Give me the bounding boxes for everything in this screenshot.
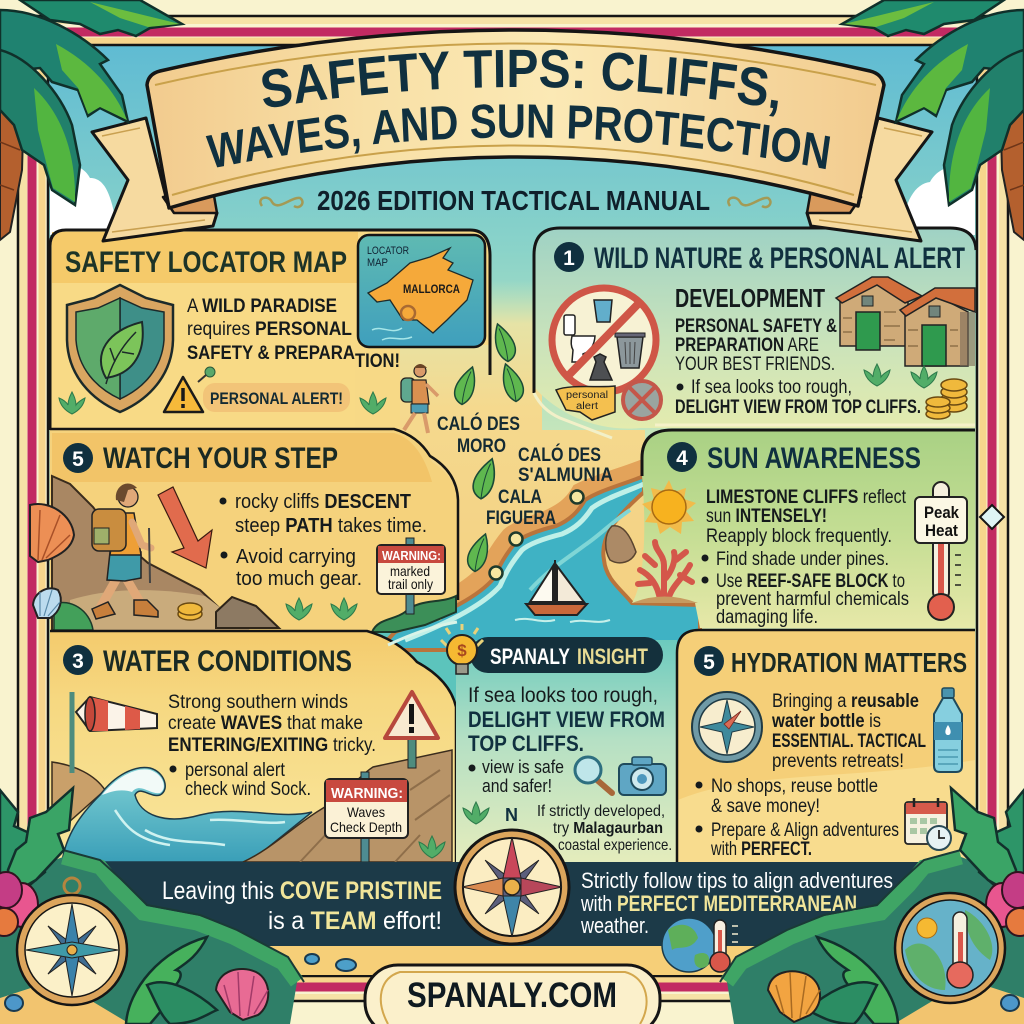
text: wild paradise — [187, 296, 400, 372]
number badge 4: 4 — [676, 447, 688, 470]
text: hydration body: Prepare & Align adventures — [711, 820, 899, 841]
text: sun awareness body: damaging life. — [716, 607, 818, 628]
text: insight body: DELIGHT VIEW FROM — [468, 707, 665, 732]
heading: sun awareness: SUN AWARENESS — [707, 442, 921, 475]
text: development: DEVELOPMENT — [675, 283, 825, 313]
map: hiker, leaves and place labels — [401, 324, 613, 622]
text: wild paradise: requires PERSONAL — [187, 319, 352, 340]
title ribbon — [145, 28, 886, 210]
icon: thermometer peak heat — [915, 482, 967, 620]
number badge 5 — [63, 443, 93, 473]
panel: watch your step — [50, 429, 458, 632]
panel: safety locator map — [50, 230, 490, 430]
map: hiker, leaves and place labels: S'ALMUNIA — [518, 465, 613, 486]
text: perfect weather message: with PERFECT MEDITERRANEAN — [580, 891, 857, 916]
insight pill with bulb: $ — [457, 641, 467, 660]
icon: sun — [642, 480, 696, 534]
text: insight body: and safer! — [482, 776, 552, 796]
icon: shield with leaf — [67, 285, 173, 412]
text: hydration body: Bringing a reusable — [772, 691, 919, 712]
text: development: PREPARATION ARE — [675, 335, 819, 356]
cliff — [243, 750, 452, 862]
text: development: PERSONAL SAFETY & — [675, 316, 837, 337]
icon: orange shell on frame — [30, 504, 74, 562]
text: perfect weather message: Strictly follow tips to align adventures — [581, 868, 893, 893]
text: wild paradise: A WILD PARADISE — [187, 296, 337, 317]
warning sign: waves: Waves — [347, 804, 385, 820]
text: insight body: If sea looks too rough, — [468, 684, 658, 707]
icon: thermometer peak heat: Peak — [924, 503, 959, 522]
text: development: DELIGHT VIEW FROM TOP CLIFFS. — [675, 397, 921, 418]
text: hydration body: with PERFECT. — [710, 839, 812, 860]
icon: stone houses — [836, 277, 975, 366]
cliffs and ground — [52, 476, 456, 632]
text: wild paradise: SAFETY & PREPARA — [187, 343, 355, 364]
palm left — [0, 0, 182, 240]
clouds — [50, 165, 975, 235]
text: watch your step body: rocky cliffs DESCENT — [235, 491, 411, 513]
text: hydration body — [696, 691, 926, 860]
sea and coast — [378, 476, 700, 650]
text: hydration body: prevents retreats! — [772, 751, 904, 772]
locator map inset: LOCATOR — [367, 245, 409, 257]
panel: sun awareness — [632, 425, 975, 628]
scene: shore — [52, 762, 105, 830]
warning sign: marked trail: trail only — [388, 576, 433, 592]
text: watch your step body: too much gear. — [236, 568, 362, 590]
insight pill with bulb: SPANALY — [490, 644, 570, 669]
locator map inset: MAP — [367, 257, 388, 269]
text: wild paradise: TION! — [355, 351, 400, 372]
heading: safety locator map: SAFETY LOCATOR MAP — [65, 246, 347, 279]
icon: coral — [632, 542, 698, 603]
warning triangle — [385, 692, 438, 768]
icon: pink flower left — [0, 872, 38, 936]
map: hiker, leaves and place labels: FIGUERA — [486, 508, 556, 529]
title text line 2: WAVES, AND SUN PROTECTION — [206, 104, 830, 170]
icon: compass — [692, 692, 762, 762]
text: development: If sea looks too rough, — [691, 377, 852, 398]
text: insight body: TOP CLIFFS. — [468, 731, 584, 756]
warning sign: marked trail: marked — [390, 563, 430, 579]
foliage: bottom left — [0, 788, 304, 1024]
text: watch your step body: steep PATH takes time. — [235, 515, 427, 537]
arrow: descent — [158, 487, 212, 568]
warning sign: waves: WARNING: — [331, 785, 403, 802]
text: sun awareness body: Reapply block frequently. — [706, 526, 892, 547]
palm right — [842, 0, 1024, 240]
number badge 1 — [554, 242, 584, 272]
map: hiker, leaves and place labels: CALÓ DES — [437, 413, 520, 435]
text: water conditions body: check wind Sock. — [185, 779, 311, 800]
wave — [62, 767, 312, 862]
text: insight note: If strictly developed, — [537, 803, 665, 820]
text: water conditions body: ENTERING/EXITING tricky. — [168, 735, 376, 756]
text: development — [675, 283, 921, 418]
personal alert tag: personal — [566, 389, 608, 401]
central coast map background — [345, 280, 700, 720]
text: hydration body: water bottle is — [771, 711, 881, 732]
icon: coins — [926, 379, 967, 419]
compass north mark: N — [505, 805, 518, 825]
foliage: bottom right — [720, 788, 1024, 1024]
text: hydration body: ESSENTIAL. TACTICAL — [772, 731, 926, 752]
panel: hydration matters — [677, 630, 975, 864]
text: hydration body: No shops, reuse bottle — [711, 776, 878, 797]
text: sun awareness body: Use REEF-SAFE BLOCK to — [716, 571, 905, 592]
text: water conditions body: create WAVES that make — [168, 713, 363, 734]
icon: pink scallop shell — [216, 969, 268, 1020]
icon: small prohibition sign — [623, 381, 661, 419]
number badge 3: 3 — [72, 650, 84, 673]
text: sun awareness body: Find shade under pines. — [716, 549, 889, 570]
warning sign: waves — [325, 772, 408, 862]
sand strip — [50, 862, 976, 975]
heading: watch your step: WATCH YOUR STEP — [103, 442, 338, 475]
footer pill: spanaly.com: SPANALY.COM — [407, 976, 617, 1015]
insight pill with bulb: INSIGHT — [577, 644, 648, 669]
locator map inset: MALLORCA — [403, 282, 460, 296]
text: insight note: coastal experience. — [558, 837, 672, 854]
personal alert tag — [556, 386, 615, 420]
icon: left compass — [17, 878, 127, 1005]
text: watch your step body: Avoid carrying — [236, 546, 356, 568]
pebbles — [305, 954, 356, 971]
icon: frame diamond — [980, 505, 1004, 529]
text: insight note: try Malagaurban — [553, 820, 663, 837]
text: sun awareness body — [702, 487, 909, 628]
text: water conditions body: Strong southern winds — [168, 692, 348, 713]
coastal rocks — [606, 526, 636, 563]
icon: central compass — [455, 830, 569, 944]
icon: camera — [619, 757, 666, 795]
text: sun awareness body: sun INTENSELY! — [706, 506, 827, 527]
icon: prohibited litter sign — [552, 288, 656, 392]
icon: hiker with backpack — [92, 484, 158, 619]
personal alert callout — [164, 367, 350, 412]
heading: water conditions: WATER CONDITIONS — [103, 645, 352, 678]
map: hiker, leaves and place labels: CALA — [498, 487, 542, 508]
text: cove pristine message: is a TEAM effort! — [268, 907, 442, 935]
icon: globe and thermometer — [662, 918, 738, 972]
text: watch your step body — [220, 491, 427, 590]
panel: water conditions — [50, 631, 456, 864]
text: insight note — [537, 803, 672, 854]
icon: small hiker — [401, 364, 438, 433]
panel: wild nature and personal alert — [534, 228, 976, 438]
icon: pink flower right — [986, 872, 1024, 936]
number badge 3 — [63, 645, 93, 675]
ribbon tail right — [807, 118, 932, 241]
text: water conditions body — [168, 692, 376, 800]
icon: blue shell on frame — [33, 588, 61, 618]
text: perfect weather message — [580, 868, 893, 938]
number badge 5 — [694, 646, 724, 676]
icon: magnifying glass — [575, 757, 612, 793]
number badge 5: 5 — [72, 448, 84, 471]
icon: water bottle — [934, 688, 962, 772]
number badge 1: 1 — [563, 247, 575, 270]
map: hiker, leaves and place labels: MORO — [457, 436, 506, 457]
title text line 1: SAFETY TIPS: CLIFFS, — [262, 50, 778, 117]
text: water conditions body: personal alert — [185, 760, 286, 781]
icon: calendar and clock — [905, 798, 951, 850]
icon: wind sock — [72, 692, 157, 773]
warning sign: marked trail — [377, 538, 445, 614]
ribbon tail left — [92, 118, 217, 241]
personal alert callout: PERSONAL ALERT! — [210, 389, 343, 408]
text: sun awareness body: prevent harmful chemicals — [716, 589, 909, 610]
panel: spanaly insight — [388, 622, 677, 862]
personal alert tag: alert — [576, 401, 598, 412]
coast band — [395, 468, 644, 626]
bottom message band — [90, 862, 950, 946]
icon: orange scallop shell — [768, 971, 820, 1022]
locator map inset — [358, 235, 485, 347]
text: insight body: view is safe — [482, 757, 564, 777]
text: cove pristine message — [162, 877, 442, 935]
footer pill: spanaly.com — [365, 965, 660, 1024]
text: sun awareness body: LIMESTONE CLIFFS reflect — [706, 487, 907, 508]
text: cove pristine message: Leaving this COVE PRISTINE — [162, 877, 442, 905]
icon: thermometer peak heat: Heat — [925, 521, 958, 540]
number badge 4 — [667, 442, 697, 472]
number badge 5: 5 — [703, 651, 715, 674]
subtitle: 2026 EDITION TACTICAL MANUAL — [317, 185, 710, 216]
text: insight body — [468, 684, 665, 796]
icon: sailboat — [515, 560, 610, 622]
icon: globe and thermometer medallion — [895, 893, 1005, 1003]
warning sign: waves: Check Depth — [330, 819, 402, 835]
text: development: YOUR BEST FRIENDS. — [675, 354, 835, 375]
icon: coin — [178, 603, 202, 620]
text: hydration body: & save money! — [711, 796, 820, 817]
warning sign: marked trail: WARNING: — [382, 548, 441, 563]
map: hiker, leaves and place labels: CALÓ DES — [518, 444, 601, 466]
insight pill with bulb — [441, 624, 663, 674]
text: perfect weather message: weather. — [580, 913, 649, 938]
